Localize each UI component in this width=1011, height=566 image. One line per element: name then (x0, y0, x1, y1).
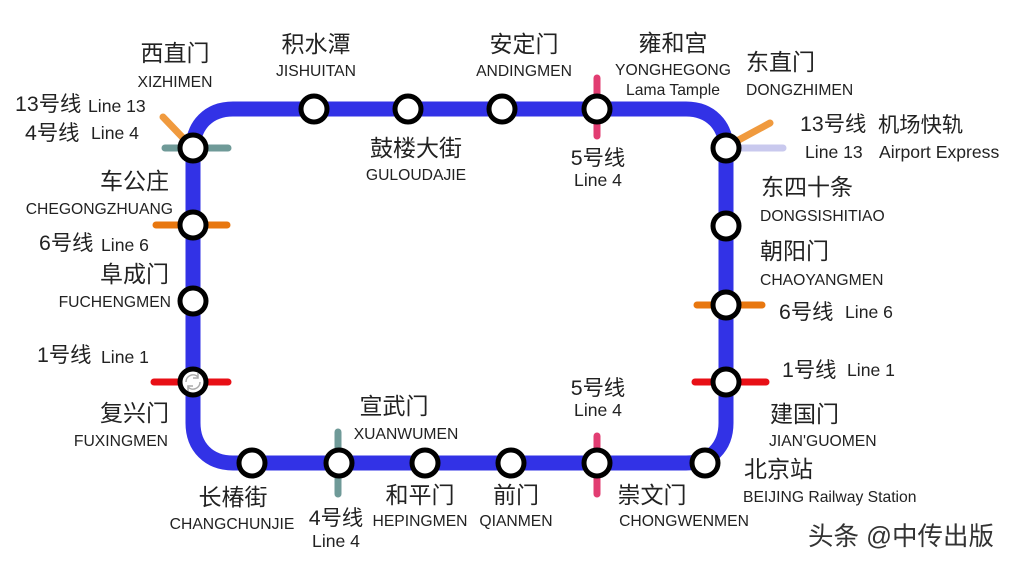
label: Yonghegong: 雍和宫 (638, 30, 708, 56)
label: Line 1 east: Line 1 (847, 360, 895, 380)
label: Line 5 north: 5号线 (571, 146, 625, 170)
label: Andingmen: 安定门 (490, 31, 558, 57)
label: Line 13 and Line 4 at Xizhimen: 13号线 (15, 92, 81, 116)
label: Line 5 south: Line 4 (574, 400, 622, 420)
label: Chegongzhuang: 车公庄 (100, 168, 169, 194)
label: Fuchengmen (59, 261, 171, 311)
label: Line 13 and Airport Express: 机场快轨 (878, 113, 963, 137)
label: Chongwenmen: 崇文门 (618, 482, 686, 508)
watermark: 头条 @中传出版 (808, 523, 994, 551)
label: Jianguomen: 建国门 (770, 401, 839, 427)
label: Chegongzhuang: CHEGONGZHUANG (26, 201, 173, 218)
label: Fuchengmen: FUCHENGMEN (59, 294, 171, 311)
label: Andingmen: ANDINGMEN (476, 63, 572, 80)
label: Andingmen (476, 31, 572, 80)
label: Line 6 east: Line 6 (845, 302, 893, 322)
label: Line 4 south (309, 506, 363, 551)
label: Xuanwumen (354, 393, 458, 443)
label: Line 1 west: 1号线 (37, 343, 91, 367)
label: Fuchengmen: 阜成门 (100, 261, 169, 287)
label: Jishuitan: JISHUITAN (276, 63, 356, 80)
label: Gulou Dajie: GULOUDAJIE (366, 167, 466, 184)
label: Line 5 north: Line 4 (574, 170, 622, 190)
loop line (193, 109, 726, 463)
label: Gulou Dajie (366, 135, 466, 184)
label: Line 5 south (571, 376, 625, 420)
label: Dongsishitiao: DONGSISHITIAO (760, 208, 885, 225)
label: Line 5 north (571, 146, 625, 190)
label: Chaoyangmen: CHAOYANGMEN (760, 272, 883, 289)
label: Line 13 and Line 4 at Xizhimen: 4号线 (25, 121, 79, 145)
label: Yonghegong (615, 30, 731, 99)
label: Line 6 west (39, 231, 149, 255)
label: Hepingmen: HEPINGMEN (372, 513, 468, 530)
icon: transfer arrows (186, 373, 200, 391)
label: Hepingmen: 和平门 (386, 482, 454, 508)
label: Line 1 west (37, 343, 149, 367)
label: Line 5 south: 5号线 (571, 376, 625, 400)
label: Fuxingmen: FUXINGMEN (74, 433, 168, 450)
label: Qianmen: QIANMEN (479, 513, 553, 530)
label: Line 13 and Line 4 at Xizhimen: Line 4 (91, 123, 139, 143)
label: Line 1 east: 1号线 (782, 358, 836, 382)
label: Line 13 and Airport Express (800, 112, 999, 162)
label: Changchunjie: 长椿街 (198, 484, 268, 510)
label: Chaoyangmen: 朝阳门 (760, 238, 829, 264)
label: Line 6 east: 6号线 (779, 300, 833, 324)
transfer line stubs (154, 78, 783, 494)
label: Xuanwumen: XUANWUMEN (354, 426, 458, 443)
label: Changchunjie (170, 484, 294, 533)
label: Beijing Railway Station: 北京站 (744, 456, 813, 482)
label: Chongwenmen: CHONGWENMEN (619, 513, 749, 530)
label: Dongzhimen: 东直门 (746, 49, 815, 75)
label: Line 4 south: 4号线 (309, 506, 363, 530)
label: Dongsishitiao (760, 174, 885, 225)
label: Line 4 south: Line 4 (312, 531, 360, 551)
label: Qianmen: 前门 (493, 482, 539, 508)
label: Beijing Railway Station (743, 456, 916, 506)
label: Line 1 west: Line 1 (101, 347, 149, 367)
label: Hepingmen (372, 482, 468, 530)
label: Fuxingmen: 复兴门 (100, 400, 169, 426)
label: Jishuitan (276, 31, 356, 80)
label: Xizhimen: XIZHIMEN (138, 74, 212, 91)
label: Line 6 west: Line 6 (101, 235, 149, 255)
label: Line 1 east (782, 358, 895, 382)
label: Line 13 and Airport Express: Line 13 (805, 142, 863, 162)
label: Chongwenmen (618, 482, 749, 530)
label: Xizhimen (138, 40, 212, 91)
label: Yonghegong: Lama Tample (626, 82, 720, 99)
label: Xizhimen: 西直门 (140, 40, 210, 66)
label: Line 13 and Line 4 at Xizhimen: Line 13 (88, 96, 146, 116)
label: Jishuitan: 积水潭 (282, 31, 350, 57)
label: Fuxingmen (74, 400, 169, 450)
label: Line 6 east (779, 300, 893, 324)
label: Gulou Dajie: 鼓楼大街 (370, 135, 462, 161)
label: Qianmen (479, 482, 553, 530)
label: Yonghegong: YONGHEGONG (615, 62, 731, 79)
label: Line 13 and Line 4 at Xizhimen (15, 92, 146, 145)
label: Jianguomen (769, 401, 877, 450)
label: Chegongzhuang (26, 168, 173, 218)
label: Line 13 and Airport Express: Airport Express (879, 142, 999, 162)
label: Dongzhimen (746, 49, 853, 99)
label: Dongsishitiao: 东四十条 (761, 174, 853, 200)
station markers (180, 96, 739, 476)
label: Line 13 and Airport Express: 13号线 (800, 112, 866, 136)
label: Xuanwumen: 宣武门 (360, 393, 428, 419)
label: Jianguomen: JIAN'GUOMEN (769, 433, 877, 450)
label: Dongzhimen: DONGZHIMEN (746, 82, 853, 99)
label: Chaoyangmen (760, 238, 883, 289)
label: Beijing Railway Station: BEIJING Railway Station (743, 489, 916, 506)
label: Changchunjie: CHANGCHUNJIE (170, 516, 294, 533)
label: Line 6 west: 6号线 (39, 231, 93, 255)
